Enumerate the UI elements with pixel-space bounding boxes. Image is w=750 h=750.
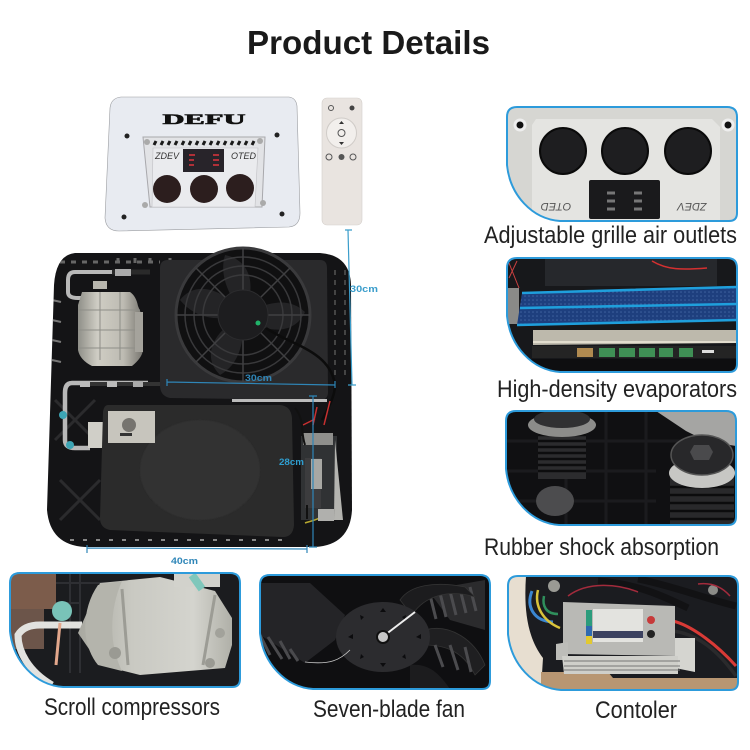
panel: grille air outlets: OTED	[541, 200, 571, 212]
battery box	[100, 405, 294, 537]
caption: Contoler	[595, 697, 677, 724]
icon: remote control	[322, 98, 362, 225]
caption: Seven-blade fan	[313, 696, 465, 723]
main unit: top view with components	[45, 248, 355, 550]
panel: grille air outlets	[507, 107, 737, 221]
fan housing	[160, 248, 335, 420]
caption: Scroll compressors	[44, 694, 220, 721]
panel: control panel product photo: OTED	[231, 151, 257, 161]
dimension line: 40cm	[87, 545, 307, 567]
panel: scroll compressors	[10, 573, 240, 687]
dimension line: 30cm depth: 30cm	[350, 284, 378, 295]
title: Product Details	[247, 25, 490, 62]
logo: DEFU: DEFU	[162, 112, 246, 128]
controller with wires	[295, 401, 343, 523]
panel: grille air outlets: ZDEV	[676, 200, 708, 212]
panel: controller	[508, 576, 738, 690]
dimension line: 30cm depth	[345, 230, 378, 385]
compressor	[78, 281, 143, 366]
dimension line: 30cm width	[167, 373, 335, 388]
dimension line: 30cm width: 30cm	[245, 373, 272, 384]
pipes	[59, 269, 160, 449]
dimension line: 28cm	[279, 396, 317, 547]
panel: control panel product photo: ZDEV	[154, 151, 180, 161]
panel: evaporators	[507, 258, 737, 372]
dimension line: 28cm: 28cm	[279, 457, 304, 468]
panel: control panel product photo	[105, 97, 300, 231]
panel: rubber shock absorption	[506, 410, 736, 525]
dimension line: 40cm: 40cm	[171, 556, 198, 567]
panel: seven-blade fan	[260, 575, 490, 689]
caption: Rubber shock absorption	[484, 534, 719, 561]
